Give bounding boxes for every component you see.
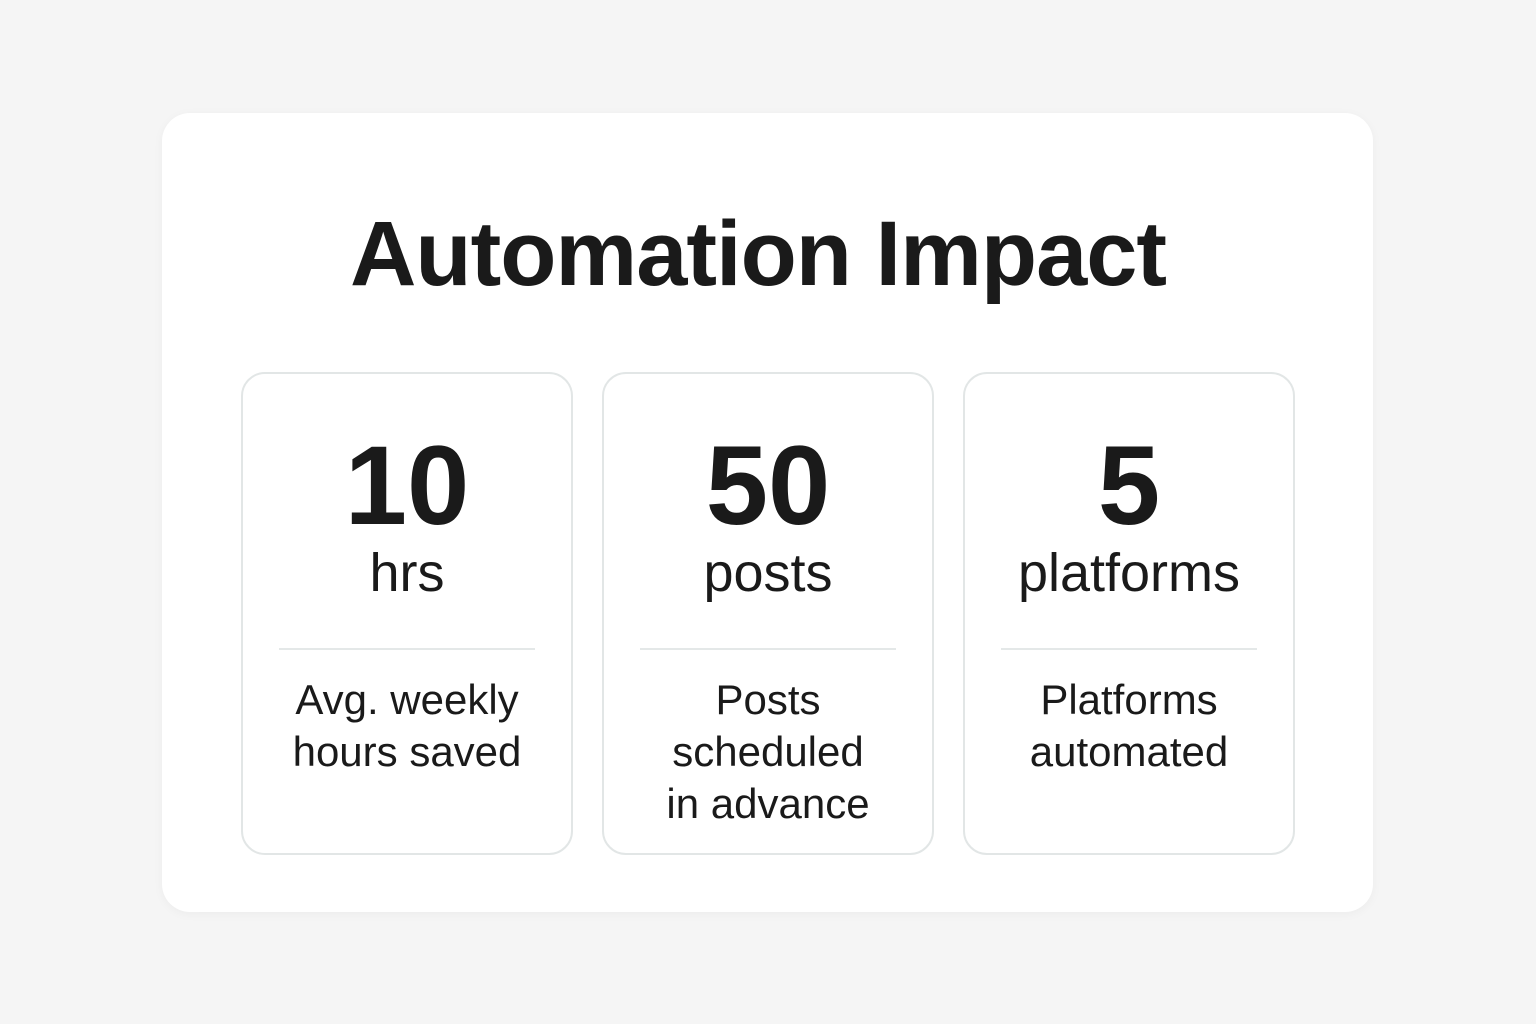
description: hours saved	[293, 676, 521, 775]
description: platforms automated: automated	[1030, 728, 1228, 775]
number: 10: 10	[345, 423, 469, 548]
unit: posts: posts	[703, 543, 833, 603]
description: posts scheduled: in advance	[666, 780, 870, 827]
description: platforms automated	[1030, 676, 1228, 775]
card: posts scheduled	[602, 372, 934, 855]
unit: hrs: hrs	[369, 543, 444, 603]
description: platforms automated: Platforms	[1040, 676, 1218, 723]
panel: main card	[162, 113, 1373, 912]
title: Automation Impact	[350, 203, 1166, 305]
description: posts scheduled	[666, 676, 870, 827]
card: platforms	[963, 372, 1295, 855]
description: hours saved: Avg. weekly	[295, 676, 519, 723]
unit: platforms: platforms	[1018, 543, 1240, 603]
description: posts scheduled: scheduled	[672, 728, 864, 775]
description: hours saved: hours saved	[293, 728, 521, 775]
description: posts scheduled: Posts	[715, 676, 821, 723]
card: hours saved	[241, 372, 573, 855]
number: 50: 50	[706, 423, 830, 548]
number: 5: 5	[1098, 423, 1160, 548]
